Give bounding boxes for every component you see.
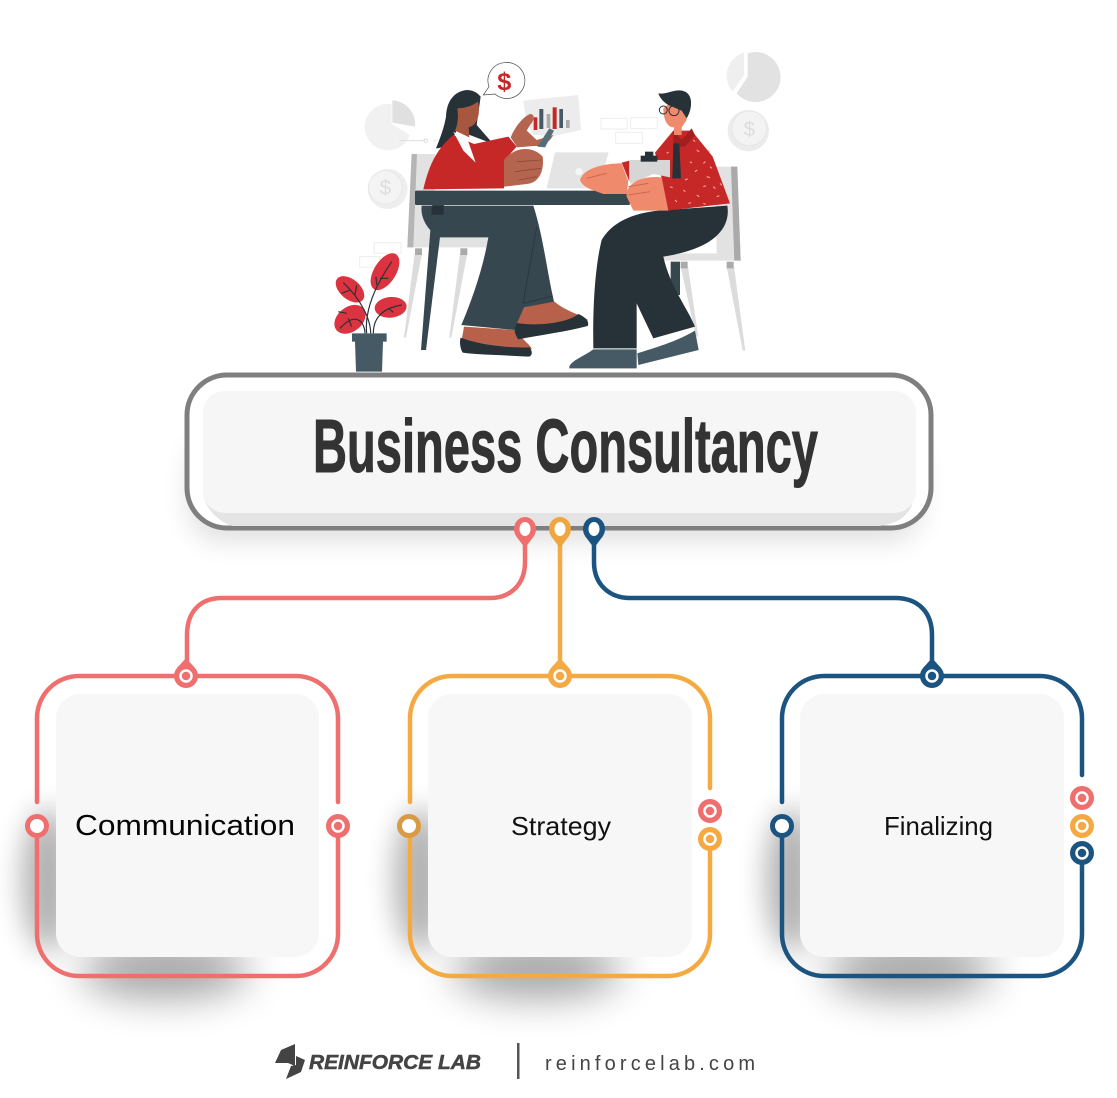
title nodes [514,517,605,548]
label: Finalizing [884,811,993,841]
icon: logo mark [275,1044,305,1079]
background icons: charts and coins: $ [744,118,756,141]
label: Communication [75,810,295,842]
table [415,191,630,350]
title text: Business Consultancy [313,404,818,488]
background icons: charts and coins: $ [380,177,392,200]
bar chart sheet [523,95,581,136]
potted plant [329,248,408,372]
connector: navy [594,528,932,676]
footer logo [275,1044,481,1079]
title panel [187,375,931,540]
nodes [25,658,350,838]
speech bubble: dollar [483,62,525,98]
laptop [547,152,609,188]
man [569,90,730,368]
left chair [404,154,488,338]
speech bubble: dollar: $ [497,68,511,96]
brand name: REINFORCE LAB [309,1052,481,1074]
right chair [663,167,745,351]
connector: coral [187,528,525,676]
footer divider [517,1043,520,1079]
nodes [770,658,1094,865]
website: reinforcelab.com [545,1053,755,1075]
woman [421,90,588,357]
card: Communication [22,658,350,998]
connector: gold [558,528,562,676]
card: Strategy [394,658,722,998]
label: Strategy [511,811,611,841]
nodes [397,658,722,851]
card: Finalizing [766,658,1094,998]
background icons: charts and coins [360,52,781,267]
illustration: business meeting [329,52,781,372]
